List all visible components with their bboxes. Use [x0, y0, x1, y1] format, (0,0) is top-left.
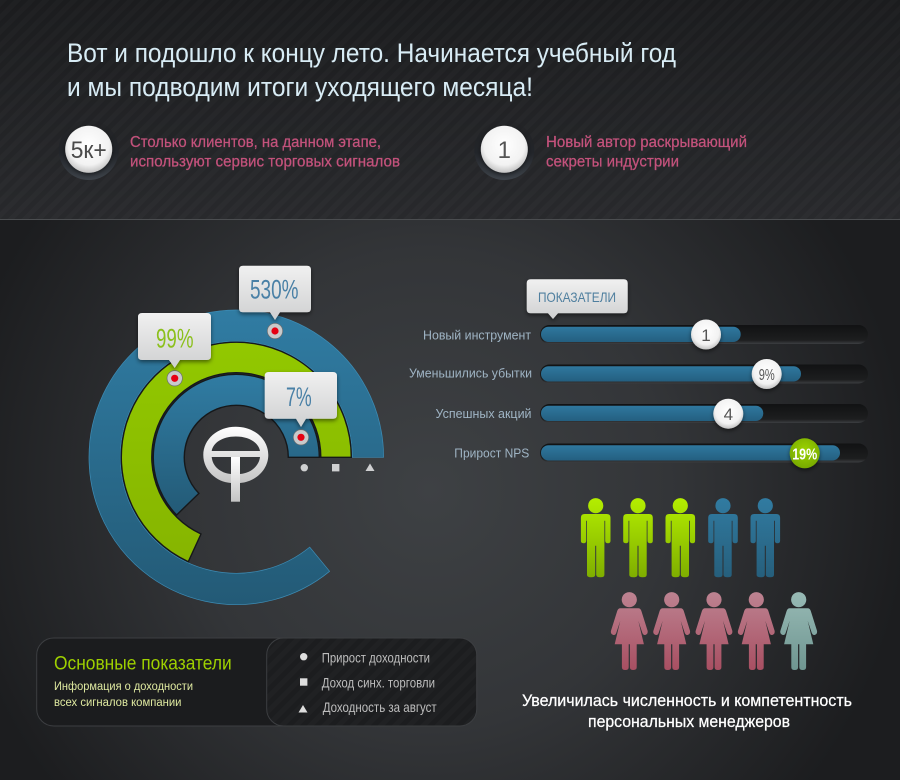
- ring: inner blue: [153, 374, 319, 515]
- legend marks on chart: [301, 464, 374, 471]
- stat text: clients: Столько клиентов, на данном этапе,: [130, 134, 381, 151]
- callout: 530%: 530%: [250, 274, 298, 304]
- bar chart: indicators: [409, 279, 868, 468]
- text: description: [54, 681, 193, 709]
- legend item: yield growth: [300, 650, 430, 666]
- caption: managers: [522, 692, 852, 731]
- bar: NPS growth: 19%: [792, 446, 817, 464]
- bar: successful promotions: 4: [724, 405, 733, 424]
- panel: main indicators: [37, 638, 477, 726]
- heading: main indicators: Основные показатели: [54, 654, 232, 674]
- icon: 5k badge: [59, 120, 119, 180]
- bar: NPS growth: [454, 438, 868, 468]
- bar: new instrument: Новый инструмент: [423, 328, 531, 342]
- header band: [0, 0, 900, 220]
- legend item: august yield: Доходность за август: [323, 699, 437, 715]
- ring: green: [121, 342, 351, 562]
- people: women row: [611, 592, 817, 670]
- bar: new instrument: [423, 320, 868, 350]
- bar: successful promotions: [436, 399, 868, 429]
- stat text: author: [546, 134, 747, 170]
- callout: indicators: [527, 279, 628, 319]
- title: [67, 38, 676, 102]
- icon: 1 badge: 1: [498, 137, 511, 164]
- text: description: Информация о доходности: [54, 681, 193, 693]
- callout: 7%: [265, 372, 337, 427]
- callout: indicators: ПОКАЗАТЕЛИ: [538, 289, 616, 305]
- people: men row: [581, 498, 780, 577]
- callout: 99%: 99%: [156, 323, 194, 353]
- caption: managers: Увеличилась численность и компетентность: [522, 692, 852, 710]
- bar: successful promotions: Успешных акций: [436, 406, 532, 421]
- bar: reduced losses: [409, 359, 868, 389]
- bar: reduced losses: Уменьшились убытки: [409, 366, 532, 380]
- title: Вот и подошло к концу лето. Начинается учебный год: [67, 38, 676, 68]
- callout: 99%: [138, 313, 211, 368]
- legend panel: [267, 638, 477, 726]
- stat: new author: [474, 120, 747, 180]
- stat text: clients: [130, 134, 400, 170]
- stat text: clients: используют сервис торговых сигналов: [130, 154, 400, 170]
- pin: 99%: [167, 371, 182, 386]
- bar: reduced losses: 9%: [759, 367, 775, 384]
- pin: 530%: [267, 323, 283, 339]
- legend item: sync trading: Доход синх. торговли: [322, 674, 435, 690]
- callout: 7%: 7%: [286, 382, 312, 412]
- title: и мы подводим итоги уходящего месяца!: [67, 72, 533, 102]
- bar: NPS growth: Прирост NPS: [454, 446, 530, 461]
- ring: outer blue: [89, 310, 384, 605]
- caption: managers: персональных менеджеров: [588, 713, 790, 731]
- bar: new instrument: 1: [701, 326, 711, 345]
- icon: logo: [203, 427, 268, 502]
- stat: clients: [59, 120, 400, 180]
- legend item: yield growth: Прирост доходности: [322, 650, 430, 666]
- icon: 5k badge: 5к+: [71, 137, 107, 164]
- icon: 1 badge: [474, 120, 534, 180]
- stat text: author: Новый автор раскрывающий: [546, 134, 747, 151]
- callout: 530%: [239, 266, 311, 320]
- text: description: всех сигналов компании: [54, 697, 182, 709]
- pin: 7%: [293, 430, 309, 445]
- stat text: author: секреты индустрии: [546, 154, 679, 170]
- radial chart: [89, 266, 384, 605]
